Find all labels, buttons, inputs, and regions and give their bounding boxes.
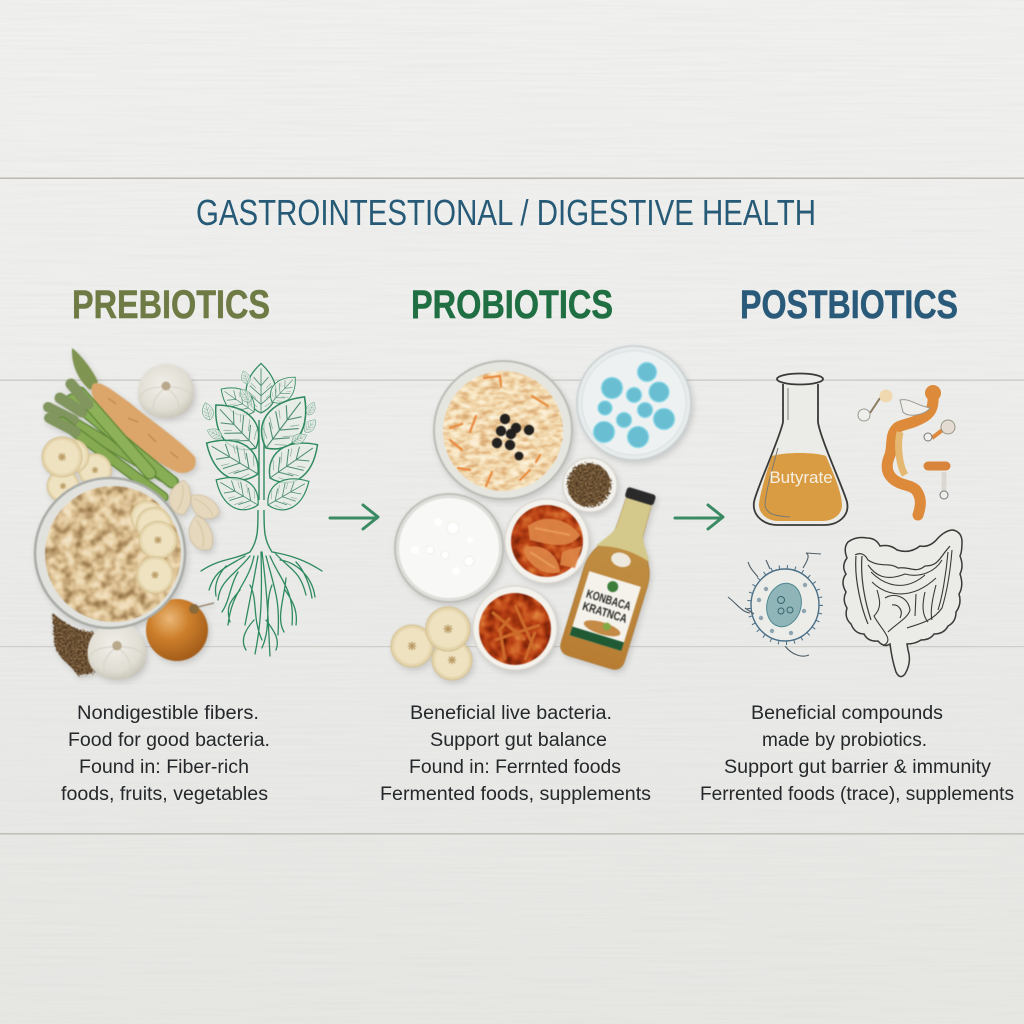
- kombucha bottle: [558, 481, 674, 672]
- text block: postbiotics: Ferrented foods (trace), supplements: [700, 784, 1014, 805]
- text block: probiotics: Found in: Ferrnted foods: [409, 757, 621, 778]
- onion: [146, 599, 214, 661]
- text block: probiotics: [380, 703, 651, 805]
- arrow: prebiotics to probiotics: [330, 505, 378, 529]
- text block: probiotics: Fermented foods, supplements: [380, 784, 651, 805]
- heading: probiotics: PROBIOTICS: [411, 283, 613, 327]
- yogurt bowl: [395, 494, 503, 602]
- arrow: probiotics to postbiotics: [675, 505, 723, 529]
- asparagus spears: [48, 384, 173, 497]
- icon: flask with butyrate: Butyrate: [769, 468, 833, 487]
- seed bowl: [563, 458, 617, 512]
- icon: orange gut tube and molecules: [858, 385, 955, 515]
- text block: probiotics: Support gut balance: [430, 730, 607, 751]
- icon: flask with butyrate: [754, 374, 847, 525]
- kimchi bowl top: [505, 499, 589, 583]
- kombucha bottle: KONBACA: [585, 587, 633, 614]
- food photo group: prebiotic foods: [35, 348, 222, 679]
- banana slices: [391, 607, 472, 680]
- panel: probiotics: [380, 283, 691, 805]
- text block: prebiotics: [61, 703, 270, 805]
- banana slices left: [42, 437, 111, 502]
- seeds pile: [52, 612, 96, 676]
- parsnip / carrot: [72, 348, 196, 473]
- text block: postbiotics: Beneficial compounds: [751, 703, 943, 724]
- panel: prebiotics: [35, 283, 328, 805]
- text block: prebiotics: foods, fruits, vegetables: [61, 784, 268, 805]
- garlic cloves: [167, 478, 222, 553]
- heading: prebiotics: PREBIOTICS: [72, 283, 270, 327]
- text block: postbiotics: Support gut barrier & immunity: [724, 757, 992, 778]
- icon: plant with roots: [197, 363, 328, 656]
- text block: prebiotics: Food for good bacteria.: [68, 730, 270, 751]
- text block: postbiotics: made by probiotics.: [762, 730, 927, 751]
- text block: postbiotics: [700, 703, 1014, 805]
- petri dish: [577, 346, 691, 460]
- food photo group: probiotic foods: [391, 346, 691, 680]
- icon: bacterium cell: [728, 553, 821, 656]
- garlic bulb bottom: [88, 623, 146, 679]
- kimchi bowl bottom: [473, 586, 557, 670]
- text block: probiotics: Beneficial live bacteria.: [410, 703, 612, 724]
- title: GASTROINTESTIONAL / DIGESTIVE HEALTH: [196, 192, 816, 233]
- garlic bulb top: [138, 364, 194, 418]
- heading: postbiotics: POSTBIOTICS: [740, 283, 958, 327]
- sauerkraut bowl: [434, 361, 572, 499]
- bowl of oats: [35, 478, 185, 628]
- panel: postbiotics: [700, 283, 1014, 805]
- text block: prebiotics: Found in: Fiber-rich: [79, 757, 249, 778]
- icon: large intestine outline: [843, 530, 962, 677]
- kombucha bottle: KRATNCA: [581, 599, 629, 626]
- text block: prebiotics: Nondigestible fibers.: [77, 703, 259, 724]
